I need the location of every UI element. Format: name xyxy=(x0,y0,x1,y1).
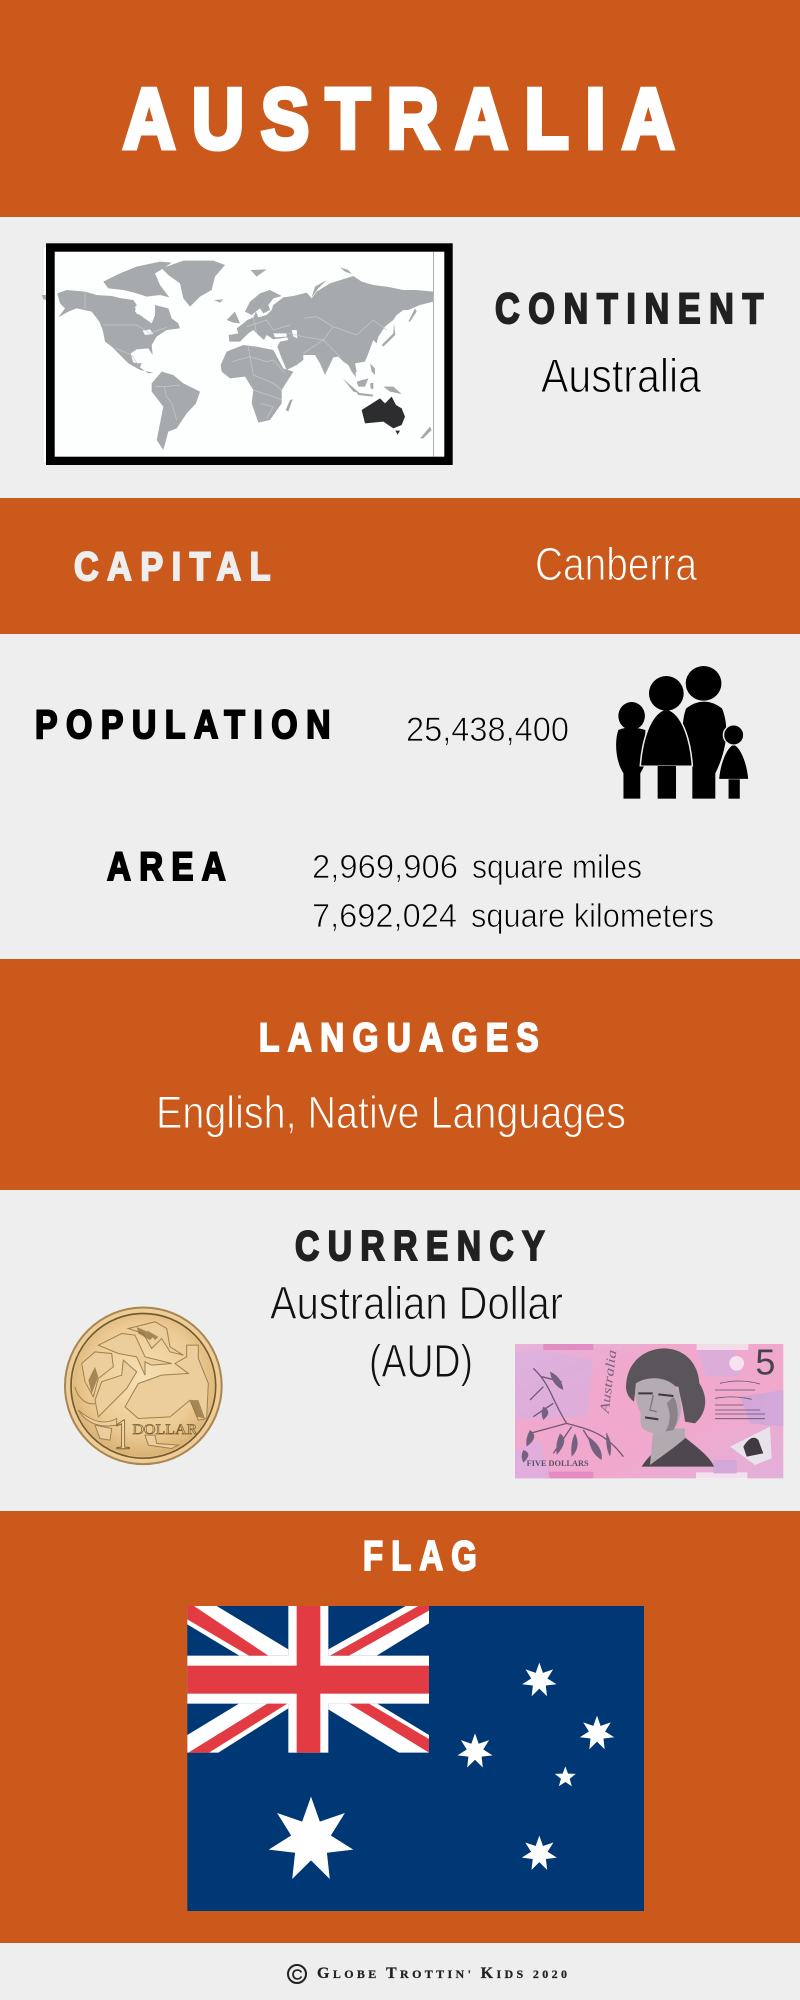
world map xyxy=(42,243,453,465)
icon: copyright xyxy=(288,1965,306,1984)
flag of Australia xyxy=(187,1606,644,1911)
population value: 25,438,400 xyxy=(406,711,569,749)
icon: five dollar banknote xyxy=(515,1342,783,1479)
eucalyptus branch xyxy=(530,1368,623,1457)
coin numeral: 1 xyxy=(114,1410,132,1458)
languages heading: LANGUAGES xyxy=(259,1016,547,1060)
icon: family xyxy=(616,666,749,799)
area square miles: square miles xyxy=(472,848,642,885)
area square miles: 2,969,906 xyxy=(312,848,458,885)
area square miles xyxy=(312,848,714,934)
languages value: English, Native Languages xyxy=(156,1087,626,1138)
banknote country: Australia xyxy=(597,1349,619,1415)
panel: population and area xyxy=(35,666,749,934)
panel: flag xyxy=(0,1511,800,1943)
banknote denomination: 5 xyxy=(755,1342,775,1383)
panel: languages xyxy=(0,959,800,1190)
capital heading: CAPITAL xyxy=(74,545,279,589)
continent value: Australia xyxy=(541,349,702,402)
capital value: Canberra xyxy=(535,538,697,590)
stars xyxy=(269,1663,614,1879)
footer xyxy=(288,1965,570,1984)
flag heading: FLAG xyxy=(363,1532,485,1579)
icon: one dollar coin xyxy=(64,1306,223,1465)
icon: copyright: C xyxy=(292,1966,303,1984)
title: AUSTRALIA xyxy=(123,72,691,167)
panel: capital xyxy=(0,498,800,634)
portrait xyxy=(626,1348,714,1467)
panel: currency xyxy=(64,1222,783,1479)
banknote label: FIVE DOLLARS xyxy=(527,1459,589,1468)
area heading: AREA xyxy=(107,845,234,889)
panel: continent xyxy=(42,243,772,465)
currency name: Australian Dollar xyxy=(270,1277,563,1329)
currency heading: CURRENCY xyxy=(295,1222,553,1269)
Australia highlighted xyxy=(362,397,405,435)
population heading: POPULATION xyxy=(35,703,339,747)
header band with title xyxy=(0,0,800,217)
coin label: DOLLAR xyxy=(132,1422,198,1438)
banknote window xyxy=(730,1427,772,1465)
footer credit: GLOBE TROTTIN' KIDS 2020 xyxy=(317,1965,570,1982)
currency code: (AUD) xyxy=(369,1335,473,1387)
union jack canton xyxy=(187,1606,429,1753)
area square miles: square kilometers xyxy=(471,897,714,934)
area square miles: 7,692,024 xyxy=(312,897,457,934)
